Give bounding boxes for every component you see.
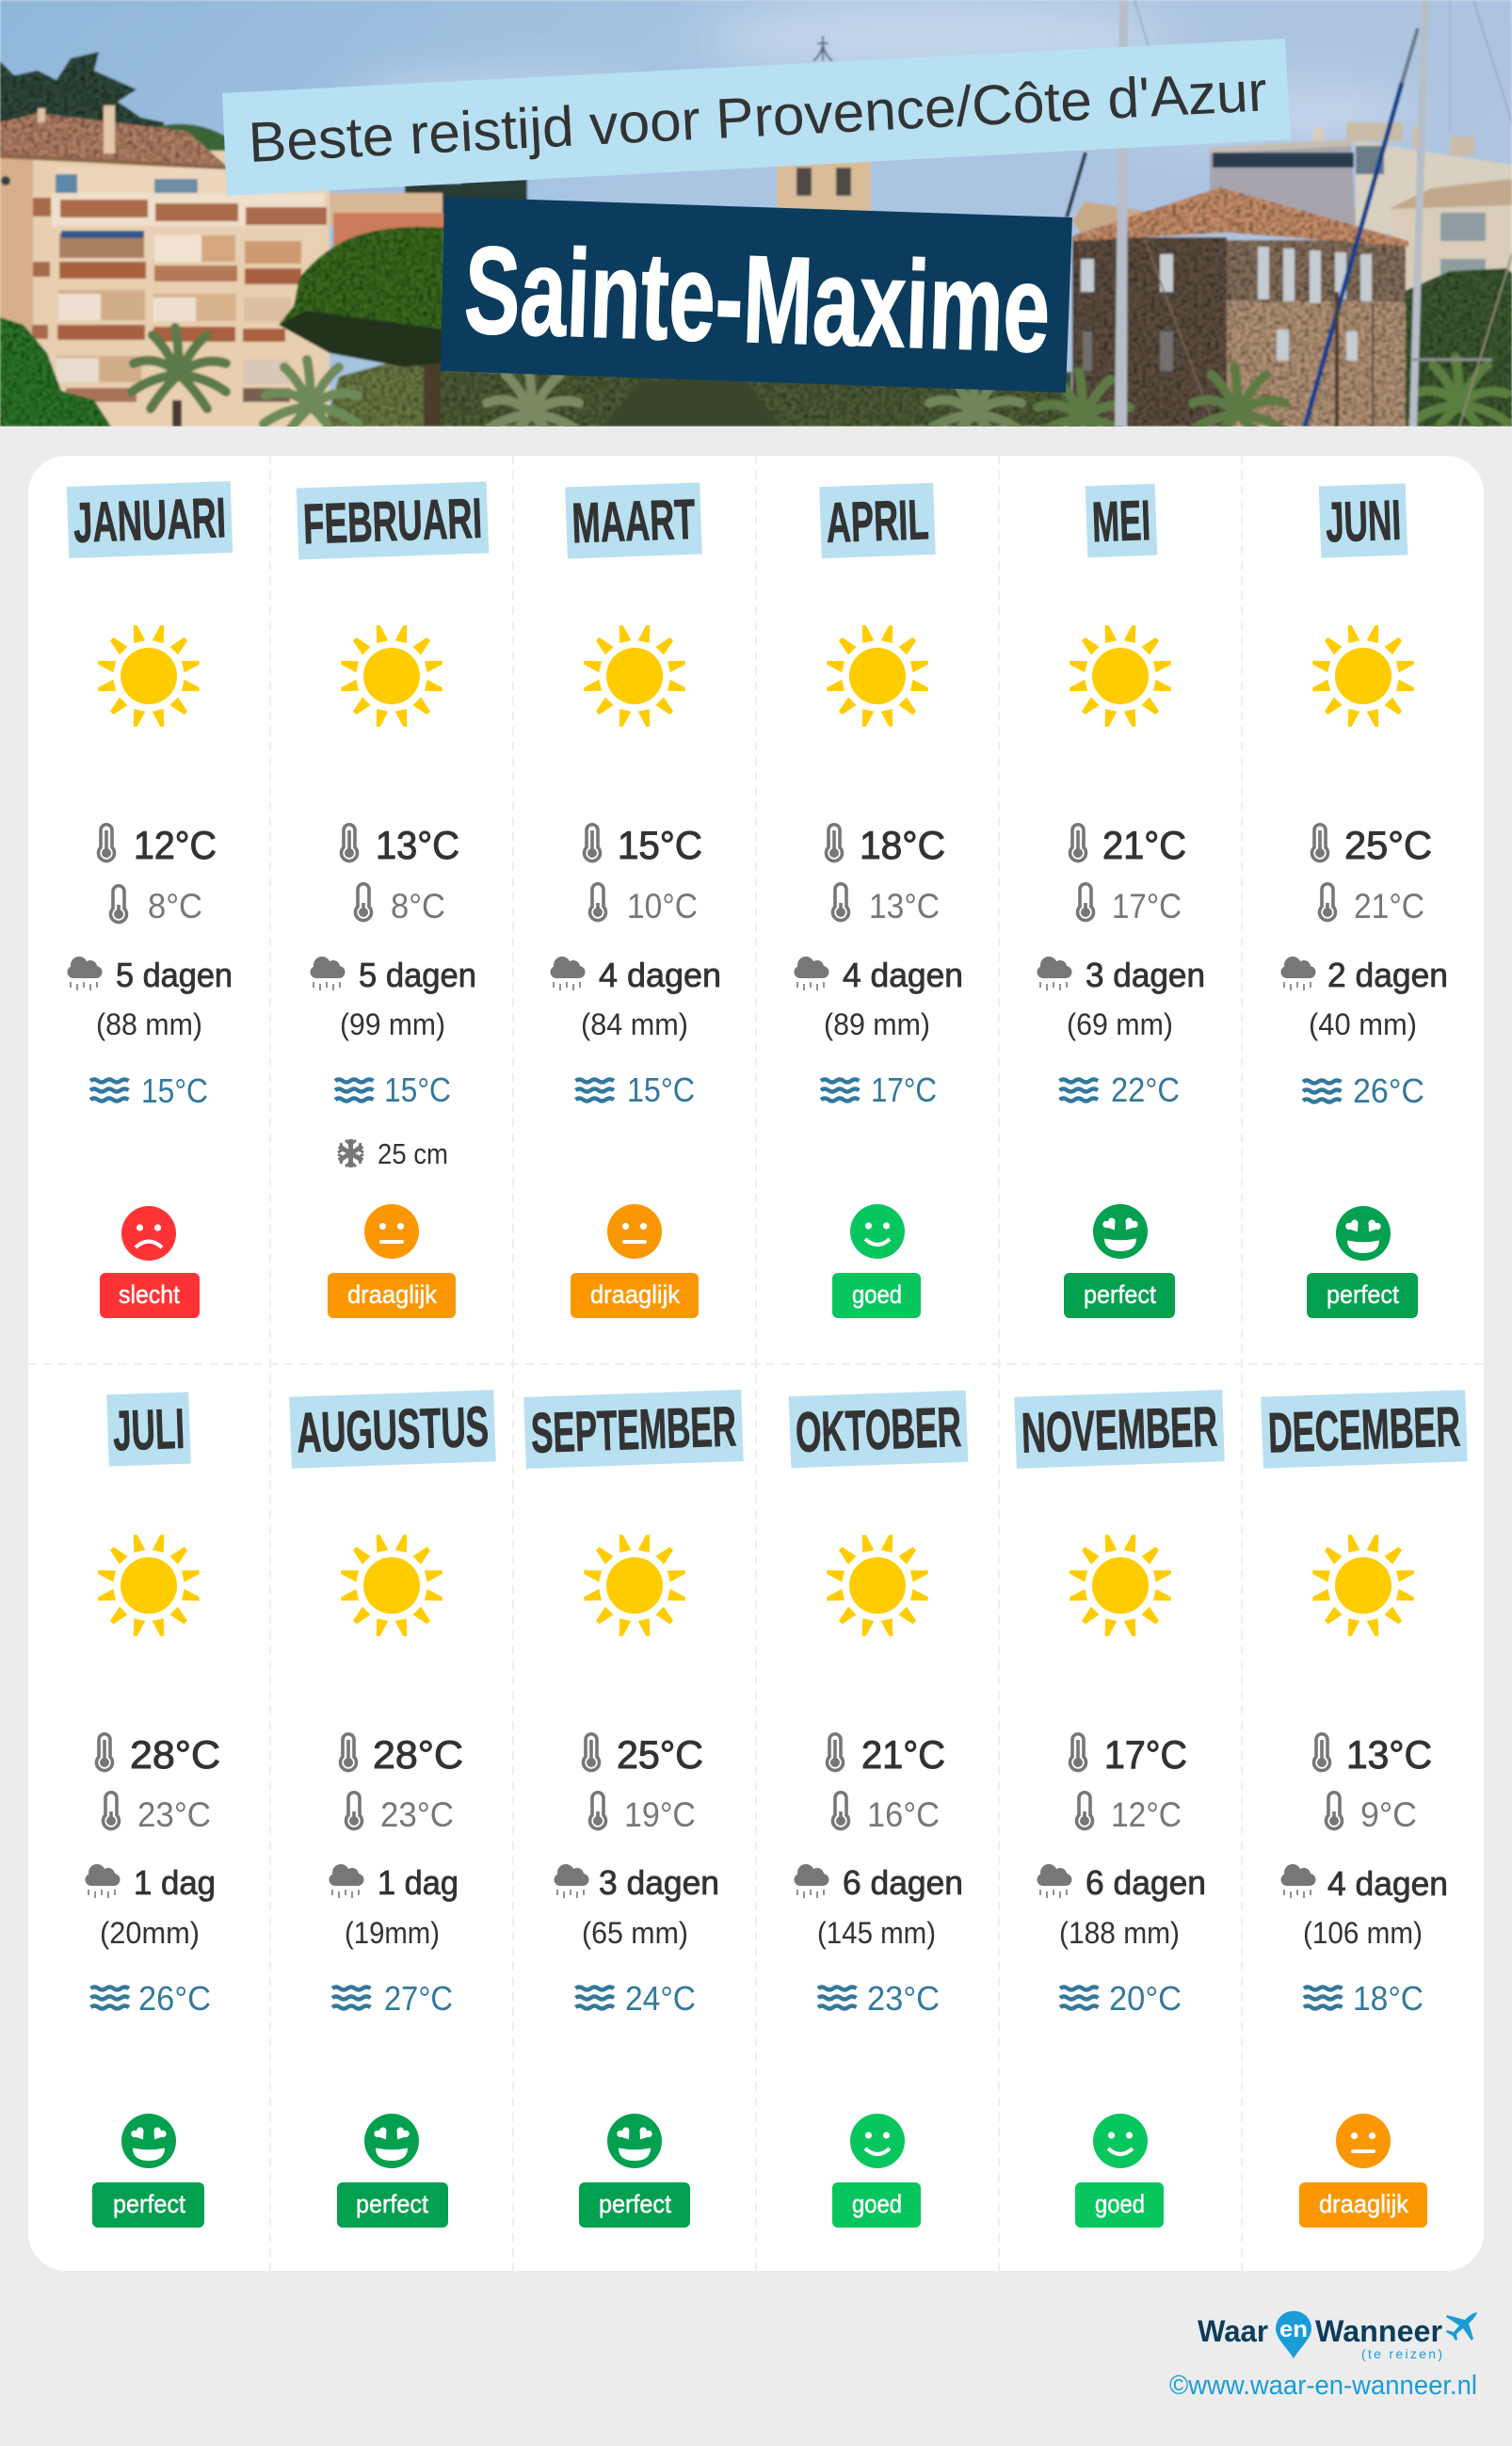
sea temperature: 27°C bbox=[384, 1979, 453, 2018]
header photo of Sainte-Maxime harbour bbox=[0, 0, 1512, 453]
rating badge: draaglijk bbox=[1319, 2190, 1408, 2218]
rainfall: (88 mm) bbox=[96, 1007, 202, 1041]
min temperature bbox=[1320, 884, 1424, 925]
cell: oktober bbox=[789, 1391, 968, 2228]
month label: augustus: AUGUSTUS bbox=[296, 1394, 490, 1465]
month label: oktober bbox=[789, 1391, 968, 1468]
cell: augustus bbox=[289, 1390, 496, 2228]
rating icon bbox=[364, 1204, 419, 1259]
cell: juli bbox=[85, 1392, 220, 2228]
rain days: 3 dagen bbox=[1086, 956, 1205, 994]
month label: februari: FEBRUARI bbox=[302, 487, 483, 555]
sea temperature: 17°C bbox=[871, 1070, 937, 1109]
max temperature: 17°C bbox=[1104, 1732, 1187, 1777]
sea temperature: 23°C bbox=[867, 1979, 940, 2018]
max temperature bbox=[98, 823, 217, 867]
icon: sun bbox=[584, 625, 685, 727]
icon: sun bbox=[827, 1535, 928, 1636]
cell: mei bbox=[1037, 484, 1205, 1318]
rainfall: (19mm) bbox=[345, 1916, 440, 1950]
min temperature: 23°C bbox=[380, 1795, 454, 1834]
month label: februari bbox=[297, 481, 489, 560]
max temperature bbox=[584, 823, 702, 867]
min temperature bbox=[832, 1793, 940, 1834]
rating badge: goed bbox=[852, 1280, 902, 1309]
rating badge: perfect bbox=[599, 2190, 671, 2218]
icon: sun bbox=[341, 625, 442, 727]
max temperature: 12°C bbox=[134, 823, 217, 867]
cell: februari bbox=[297, 481, 489, 1318]
month label: november: NOVEMBER bbox=[1021, 1394, 1218, 1465]
month label: januari: JANUARI bbox=[72, 486, 227, 555]
month label: april bbox=[819, 483, 936, 558]
month label: maart: MAART bbox=[571, 488, 697, 555]
sea temperature bbox=[332, 1979, 453, 2018]
month label: juli: JULI bbox=[112, 1397, 185, 1462]
sea temperature bbox=[818, 1979, 940, 2018]
rating icon bbox=[1336, 1206, 1391, 1261]
sea temperature: 15°C bbox=[627, 1070, 695, 1109]
month label: juni bbox=[1319, 483, 1407, 558]
month label: maart bbox=[565, 483, 702, 558]
rain days: 4 dagen bbox=[843, 956, 963, 994]
min temperature: 8°C bbox=[148, 887, 202, 925]
sea temperature: 15°C bbox=[141, 1071, 208, 1110]
rain days: 4 dagen bbox=[599, 956, 721, 994]
cell: juni bbox=[1280, 483, 1448, 1318]
logo: Waar en Wanneer: Waar bbox=[1198, 2314, 1268, 2348]
rating icon bbox=[607, 1204, 662, 1259]
cell: november bbox=[1014, 1390, 1225, 2228]
month label: september bbox=[523, 1390, 744, 1469]
rating icon bbox=[607, 2114, 662, 2168]
rating badge bbox=[1307, 1273, 1418, 1318]
rain days: 1 dag bbox=[134, 1863, 216, 1902]
min temperature: 10°C bbox=[627, 887, 698, 925]
rating badge bbox=[1075, 2182, 1164, 2228]
rain days bbox=[85, 1863, 216, 1902]
min temperature: 8°C bbox=[391, 887, 445, 925]
icon: sun bbox=[1070, 1535, 1171, 1636]
rating icon bbox=[850, 2114, 905, 2168]
rain days: 5 dagen bbox=[116, 956, 233, 994]
rating icon bbox=[1336, 2114, 1391, 2168]
rain days: 4 dagen bbox=[1327, 1864, 1448, 1903]
rating badge bbox=[92, 2182, 204, 2228]
sea temperature bbox=[1060, 1070, 1180, 1109]
rating badge: slecht bbox=[119, 1280, 180, 1309]
icon: sun bbox=[1070, 625, 1171, 727]
sea temperature: 26°C bbox=[1353, 1071, 1424, 1110]
month label: januari bbox=[67, 481, 233, 558]
sea temperature bbox=[335, 1070, 451, 1109]
title banner: Sainte-Maxime bbox=[462, 220, 1053, 378]
month label: september: SEPTEMBER bbox=[530, 1394, 737, 1465]
rating badge bbox=[832, 1273, 921, 1318]
rainfall: (89 mm) bbox=[824, 1007, 930, 1041]
rain days: 1 dag bbox=[378, 1863, 458, 1902]
max temperature: 28°C bbox=[130, 1732, 220, 1777]
icon: sun bbox=[827, 625, 928, 727]
rating badge bbox=[571, 1273, 699, 1318]
max temperature: 25°C bbox=[617, 1732, 703, 1777]
rain days: 3 dagen bbox=[599, 1863, 719, 1902]
cell: december bbox=[1261, 1390, 1468, 2228]
rainfall: (40 mm) bbox=[1309, 1007, 1417, 1041]
icon: sun bbox=[98, 625, 200, 727]
sea temperature: 26°C bbox=[138, 1979, 211, 2018]
rating icon bbox=[850, 1204, 905, 1259]
rain days bbox=[1037, 956, 1205, 994]
min temperature bbox=[346, 1793, 454, 1834]
max temperature: 13°C bbox=[1346, 1732, 1432, 1777]
icon: sun bbox=[341, 1535, 442, 1636]
max temperature: 25°C bbox=[1344, 823, 1432, 867]
rating icon bbox=[1093, 2114, 1148, 2168]
subtitle banner bbox=[222, 39, 1291, 196]
min temperature: 12°C bbox=[1111, 1795, 1182, 1834]
max temperature: 21°C bbox=[1102, 823, 1186, 867]
rain days: 6 dagen bbox=[843, 1863, 963, 1902]
rating icon bbox=[1093, 1204, 1148, 1259]
min temperature: 21°C bbox=[1354, 887, 1424, 925]
rating badge: goed bbox=[852, 2190, 902, 2218]
rainfall: (145 mm) bbox=[817, 1916, 936, 1950]
sea temperature bbox=[1303, 1071, 1424, 1110]
min temperature: 23°C bbox=[137, 1795, 211, 1834]
min temperature bbox=[832, 884, 940, 925]
rain days: 2 dagen bbox=[1327, 956, 1448, 994]
month label: mei: MEI bbox=[1091, 489, 1151, 554]
sea temperature bbox=[576, 1979, 696, 2018]
rating icon bbox=[121, 2114, 176, 2168]
max temperature bbox=[1070, 1732, 1187, 1777]
month label: april: APRIL bbox=[825, 488, 930, 555]
rainfall: (65 mm) bbox=[582, 1916, 688, 1950]
rating icon bbox=[364, 2114, 419, 2168]
rating badge bbox=[100, 1273, 200, 1318]
icon: sun bbox=[98, 1535, 200, 1636]
rating badge: perfect bbox=[113, 2190, 185, 2218]
sea temperature bbox=[1304, 1979, 1424, 2018]
sea temperature bbox=[821, 1070, 937, 1109]
rating badge: perfect bbox=[1327, 1280, 1399, 1309]
sea temperature bbox=[1060, 1979, 1182, 2018]
month label: juni: JUNI bbox=[1325, 489, 1402, 554]
sea temperature: 24°C bbox=[625, 1979, 696, 2018]
min temperature bbox=[1077, 884, 1182, 925]
rainfall: (106 mm) bbox=[1303, 1916, 1423, 1950]
month label: mei bbox=[1086, 484, 1157, 557]
panel: monthly climate table bbox=[28, 456, 1484, 2271]
rating badge bbox=[832, 2182, 921, 2228]
rainfall: (20mm) bbox=[100, 1916, 200, 1950]
min temperature: 13°C bbox=[869, 887, 940, 925]
cell: april bbox=[795, 483, 963, 1318]
rain days: 6 dagen bbox=[1086, 1863, 1206, 1902]
sea temperature: 20°C bbox=[1109, 1979, 1182, 2018]
sea temperature bbox=[90, 1071, 208, 1110]
min temperature: 17°C bbox=[1112, 887, 1182, 925]
sea temperature bbox=[576, 1070, 695, 1109]
max temperature: 15°C bbox=[618, 823, 702, 867]
rainfall: (188 mm) bbox=[1059, 1916, 1180, 1950]
rainfall: (69 mm) bbox=[1067, 1007, 1173, 1041]
cell: januari bbox=[67, 481, 233, 1318]
snowfall bbox=[338, 1137, 448, 1170]
min temperature: 9°C bbox=[1360, 1795, 1417, 1834]
icon: airplane bbox=[1446, 2312, 1477, 2341]
month label: augustus bbox=[289, 1390, 496, 1469]
logo: Waar en Wanneer: (te reizen) bbox=[1361, 2346, 1442, 2361]
max temperature bbox=[827, 1732, 945, 1777]
icon: sun bbox=[584, 1535, 685, 1636]
rainfall: (84 mm) bbox=[581, 1007, 688, 1041]
min temperature: 16°C bbox=[867, 1795, 940, 1834]
max temperature bbox=[1070, 823, 1186, 867]
rating badge: goed bbox=[1095, 2190, 1145, 2218]
snowfall: 25 cm bbox=[378, 1137, 448, 1170]
max temperature bbox=[341, 823, 459, 867]
sea temperature: 18°C bbox=[1353, 1979, 1424, 2018]
month label: juli bbox=[106, 1392, 191, 1466]
min temperature bbox=[589, 884, 698, 925]
icon: map pin bbox=[1276, 2310, 1311, 2358]
max temperature: 28°C bbox=[373, 1732, 463, 1777]
min temperature bbox=[589, 1793, 696, 1834]
min temperature bbox=[104, 1793, 211, 1834]
rating badge: draaglijk bbox=[590, 1280, 680, 1309]
min temperature bbox=[1326, 1793, 1417, 1834]
website url: ©www.waar-en-wanneer.nl bbox=[1169, 2371, 1477, 2401]
rainfall: (99 mm) bbox=[340, 1007, 445, 1041]
rating badge bbox=[337, 2182, 448, 2228]
rating icon bbox=[121, 1206, 176, 1261]
rain days: 5 dagen bbox=[359, 956, 476, 994]
rain days bbox=[68, 956, 233, 994]
min temperature bbox=[111, 886, 202, 925]
rating badge: perfect bbox=[1084, 1280, 1156, 1309]
sea temperature bbox=[90, 1979, 211, 2018]
title banner bbox=[441, 197, 1072, 393]
rating badge bbox=[1064, 1273, 1175, 1318]
cell: september bbox=[523, 1390, 744, 2228]
min temperature bbox=[356, 884, 445, 925]
sea temperature: 22°C bbox=[1111, 1070, 1180, 1109]
rating badge: draaglijk bbox=[347, 1280, 437, 1309]
max temperature: 13°C bbox=[376, 823, 459, 867]
icon: sun bbox=[1312, 1535, 1414, 1636]
max temperature: 18°C bbox=[860, 823, 945, 867]
min temperature: 19°C bbox=[624, 1795, 696, 1834]
icon: sun bbox=[1312, 625, 1414, 727]
logo: Waar en Wanneer bbox=[1198, 2310, 1477, 2361]
rating badge: perfect bbox=[356, 2190, 428, 2218]
cell: maart bbox=[550, 483, 721, 1318]
min temperature bbox=[1077, 1793, 1182, 1834]
logo: Waar en Wanneer: Wanneer bbox=[1315, 2314, 1442, 2348]
month label: oktober: OKTOBER bbox=[795, 1395, 962, 1464]
subtitle banner: Beste reistijd voor Provence/Côte d'Azur bbox=[247, 59, 1268, 174]
month label: november bbox=[1014, 1390, 1225, 1469]
rating badge bbox=[579, 2182, 690, 2228]
rating badge bbox=[1299, 2182, 1427, 2228]
icon: map pin: en bbox=[1279, 2317, 1308, 2342]
rain days bbox=[311, 956, 476, 994]
sea temperature: 15°C bbox=[384, 1070, 451, 1109]
max temperature: 21°C bbox=[861, 1732, 945, 1777]
rating badge bbox=[328, 1273, 456, 1318]
rain days bbox=[330, 1863, 458, 1902]
